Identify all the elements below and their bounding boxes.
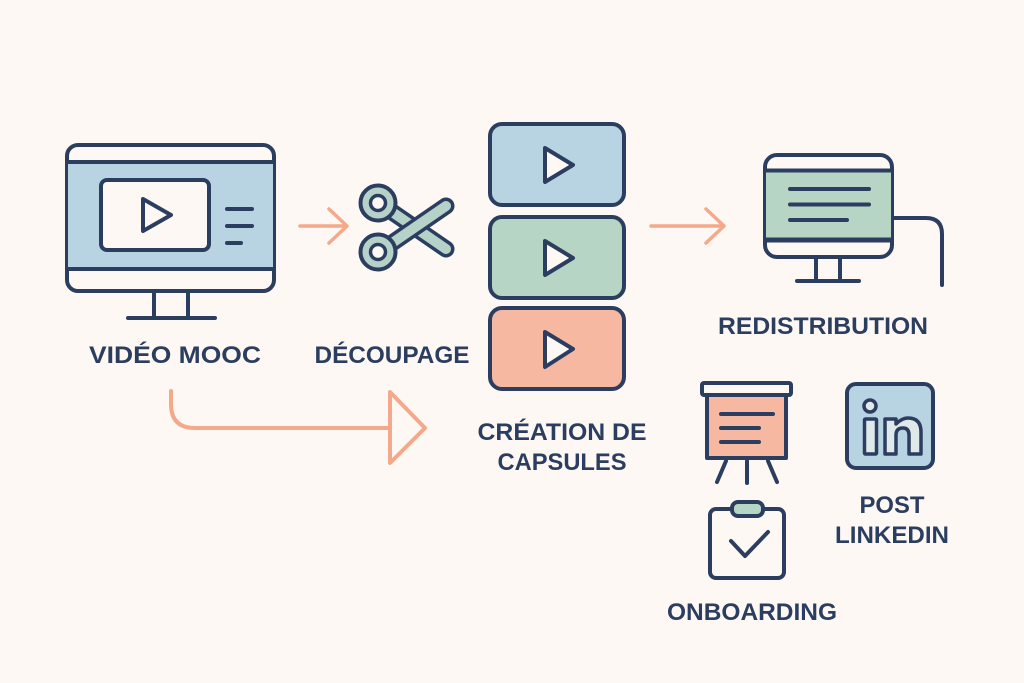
capsule: blue video [490, 124, 624, 205]
label: post linkedin: LINKEDIN [835, 522, 949, 549]
label: création de capsules [478, 418, 646, 476]
icon: scissors [360, 186, 446, 270]
capsule: coral video [490, 308, 624, 389]
arrow: monitor to scissors [300, 209, 347, 243]
label: post linkedin [835, 492, 949, 549]
icon: linkedin [847, 384, 933, 468]
label: vidéo mooc: VIDÉO MOOC [89, 341, 261, 369]
icon: presentation board [702, 383, 791, 483]
icon: monitor with video [67, 145, 274, 318]
icon: redistribution monitor [765, 155, 942, 285]
label: redistribution: REDISTRIBUTION [718, 313, 928, 340]
curved arrow: direct path to capsules [171, 391, 425, 463]
label: création de capsules: CRÉATION DE [478, 418, 646, 446]
label: onboarding: ONBOARDING [667, 599, 837, 626]
arrow: capsules to redistribution [651, 209, 724, 243]
label: découpage: DÉCOUPAGE [314, 341, 470, 369]
label: création de capsules: CAPSULES [498, 449, 626, 476]
icon: onboarding clipboard [710, 502, 784, 578]
label: post linkedin: POST [860, 492, 925, 519]
capsule: green video [490, 217, 624, 298]
